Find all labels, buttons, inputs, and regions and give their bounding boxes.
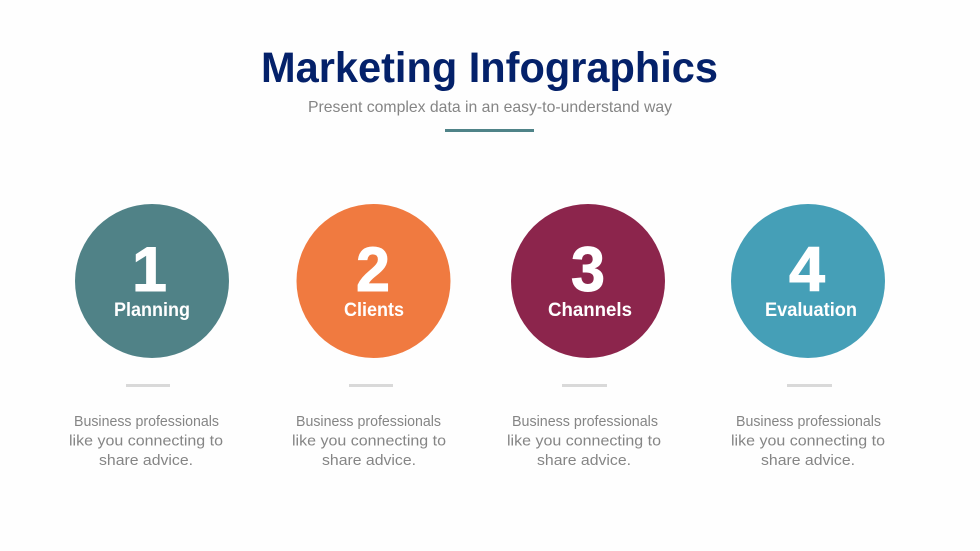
description 1: Business professionals [74,413,219,430]
label Clients: Clients [344,300,404,321]
description 4: Business professionals [736,413,881,430]
number 4: 4 [789,235,825,305]
description 4: like you connecting to [731,432,885,450]
separator 1 [126,384,170,387]
description 1: like you connecting to [69,432,223,450]
number 3: 3 [571,235,605,305]
number 1: 1 [132,235,167,305]
circle badge 3 [511,204,665,358]
description 3: like you connecting to [507,432,661,450]
description 2: Business professionals [296,413,441,430]
label Evaluation: Evaluation [765,300,857,321]
description 3: share advice. [537,452,631,469]
description 2: like you connecting to [292,432,446,450]
description 2: share advice. [322,452,416,469]
panel: step 2 Clients [292,204,450,469]
circle badge 1 [75,204,229,358]
label Planning: Planning [114,300,190,321]
circle badge 4 [731,204,885,358]
panel: step 4 Evaluation [731,204,885,469]
circle badge 2 [296,204,450,358]
panel: step 3 Channels [507,204,665,469]
panel: step 1 Planning [69,204,229,469]
title: Marketing Infographics [261,44,718,92]
number 2: 2 [356,235,390,305]
title accent bar [445,129,534,132]
description 4: share advice. [761,452,855,469]
separator 3 [562,384,607,387]
description 3: Business professionals [512,413,658,430]
subtitle: Present complex data in an easy-to-understand way [308,99,672,116]
label Channels: Channels [548,300,632,321]
description 1: share advice. [99,452,193,469]
separator 4 [787,384,832,387]
separator 2 [349,384,393,387]
